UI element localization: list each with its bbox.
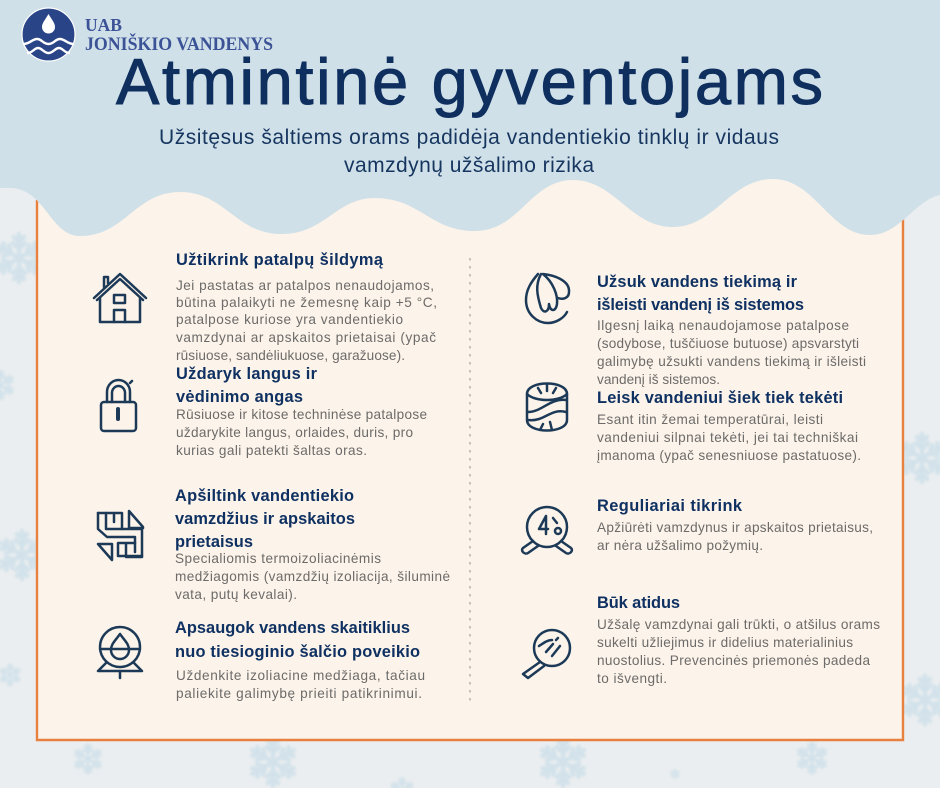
heading [597,273,804,314]
heading: išleisti vandenį iš sistemos [597,296,804,314]
text: galimybę užsukti vandens tiekimą ir išleisti [597,354,866,369]
icon: magnifier [523,630,570,678]
text: Specialiomis termoizoliacinėmis [175,551,381,566]
text: vamzdynai ar apskaitos prietaisai (ypač [176,330,436,345]
text: Jei pastatas ar patalpos nenaudojamos, [176,278,434,293]
text: sukelti užliejimus ir didelius materialinius [597,635,853,650]
heading: vėdinimo angas [176,388,303,406]
text: medžiagomis (vamzdžių izoliacija, šiluminė [175,569,450,584]
icon: frozen pipe section [527,384,567,430]
header wave [0,0,940,236]
heading: Uždaryk langus ir [176,365,318,383]
subtitle [159,126,779,177]
text: patalpose kuriose yra vandentiekio [176,312,403,327]
text [597,520,873,553]
heading: nuo tiesioginio šalčio poveikio [175,643,420,661]
text: Užšalę vamzdynai gali trūkti, o atšilus orams [597,617,880,632]
heading: Leisk vandeniui šiek tiek tekėti [597,389,843,407]
icon: pipes [98,511,143,560]
section: meter [98,619,425,701]
heading: vamzdžius ir apskaitos [175,510,355,528]
heading: Užtikrink patalpų šildymą [176,251,384,269]
text: ar nėra užšalimo požymių. [597,538,763,553]
text: paliekite galimybę prieiti patikrinimui. [176,686,422,701]
section: check regularly [522,497,873,554]
text: Uždenkite izoliacine medžiaga, tačiau [176,668,425,683]
logo [22,8,273,61]
logo text [85,15,273,55]
text: Esant itin žemai temperatūrai, leisti [597,412,823,427]
heading [176,365,318,406]
text: vata, putų kevalai). [175,587,297,602]
logo emblem [22,8,75,61]
text: rūsiuose, sandėliukuose, garažuose). [176,348,405,363]
title: Atmintinė gyventojams [116,45,823,118]
text: uždarykite langus, orlaides, duris, pro [176,425,413,440]
text: Rūsiuose ir kitose techninėse patalpose [176,407,427,422]
text: Ilgesnį laiką nenaudojamose patalpose [597,318,849,333]
text: įmanoma (ypač senesniuose pastatuose). [597,448,861,463]
panel [37,170,903,740]
snowflake pattern [0,234,940,788]
section: shut off supply [526,273,866,387]
section: insulation [98,487,450,602]
heading: Būk atidus [597,594,680,612]
icon: house [94,274,146,322]
text [597,412,861,463]
heading: Reguliariai tikrink [597,497,743,515]
icon: magnifier with gauge [522,507,572,554]
text [176,407,427,458]
heading: Apsaugok vandens skaitiklius [175,619,410,637]
subtitle: vamzdynų užšalimo rizika [344,154,594,177]
text: Apžiūrėti vamzdynus ir apskaitos prietaisus, [597,520,873,535]
section: let water run [527,384,861,463]
heading: Užsuk vandens tiekimą ir [597,273,798,291]
text: vandenį iš sistemos. [597,372,720,387]
logo text: JONIŠKIO VANDENYS [85,33,273,55]
heading: prietaisus [175,533,253,551]
text [176,278,437,363]
subtitle: Užsitęsus šaltiems orams padidėja vandentiekio tinklų ir vidaus [159,126,779,149]
text [597,318,866,387]
icon: padlock [101,380,136,431]
text: būtina palaikyti ne žemesnę kaip +5 °C, [176,295,437,310]
text: kurias gali patekti šaltas oras. [176,443,367,458]
heading [175,619,420,661]
divider [469,258,471,704]
section: heating [94,251,437,363]
text [597,617,880,686]
text [176,668,425,701]
heading: Apšiltink vandentiekio [175,487,354,505]
text: vandeniui silpnai tekėti, jei tai techniškai [597,430,858,445]
heading [175,487,355,551]
icon: leaf loop [526,274,569,323]
section: windows [101,365,427,458]
logo text: UAB [85,15,122,35]
text: nuostolius. Prevencinės priemonės padeda [597,653,870,668]
text: to išvengti. [597,671,667,686]
text: (sodybose, tuščiuose butuose) apsvarstyti [597,336,859,351]
text [175,551,450,602]
icon: water meter [98,627,142,678]
section: be careful [523,594,880,686]
